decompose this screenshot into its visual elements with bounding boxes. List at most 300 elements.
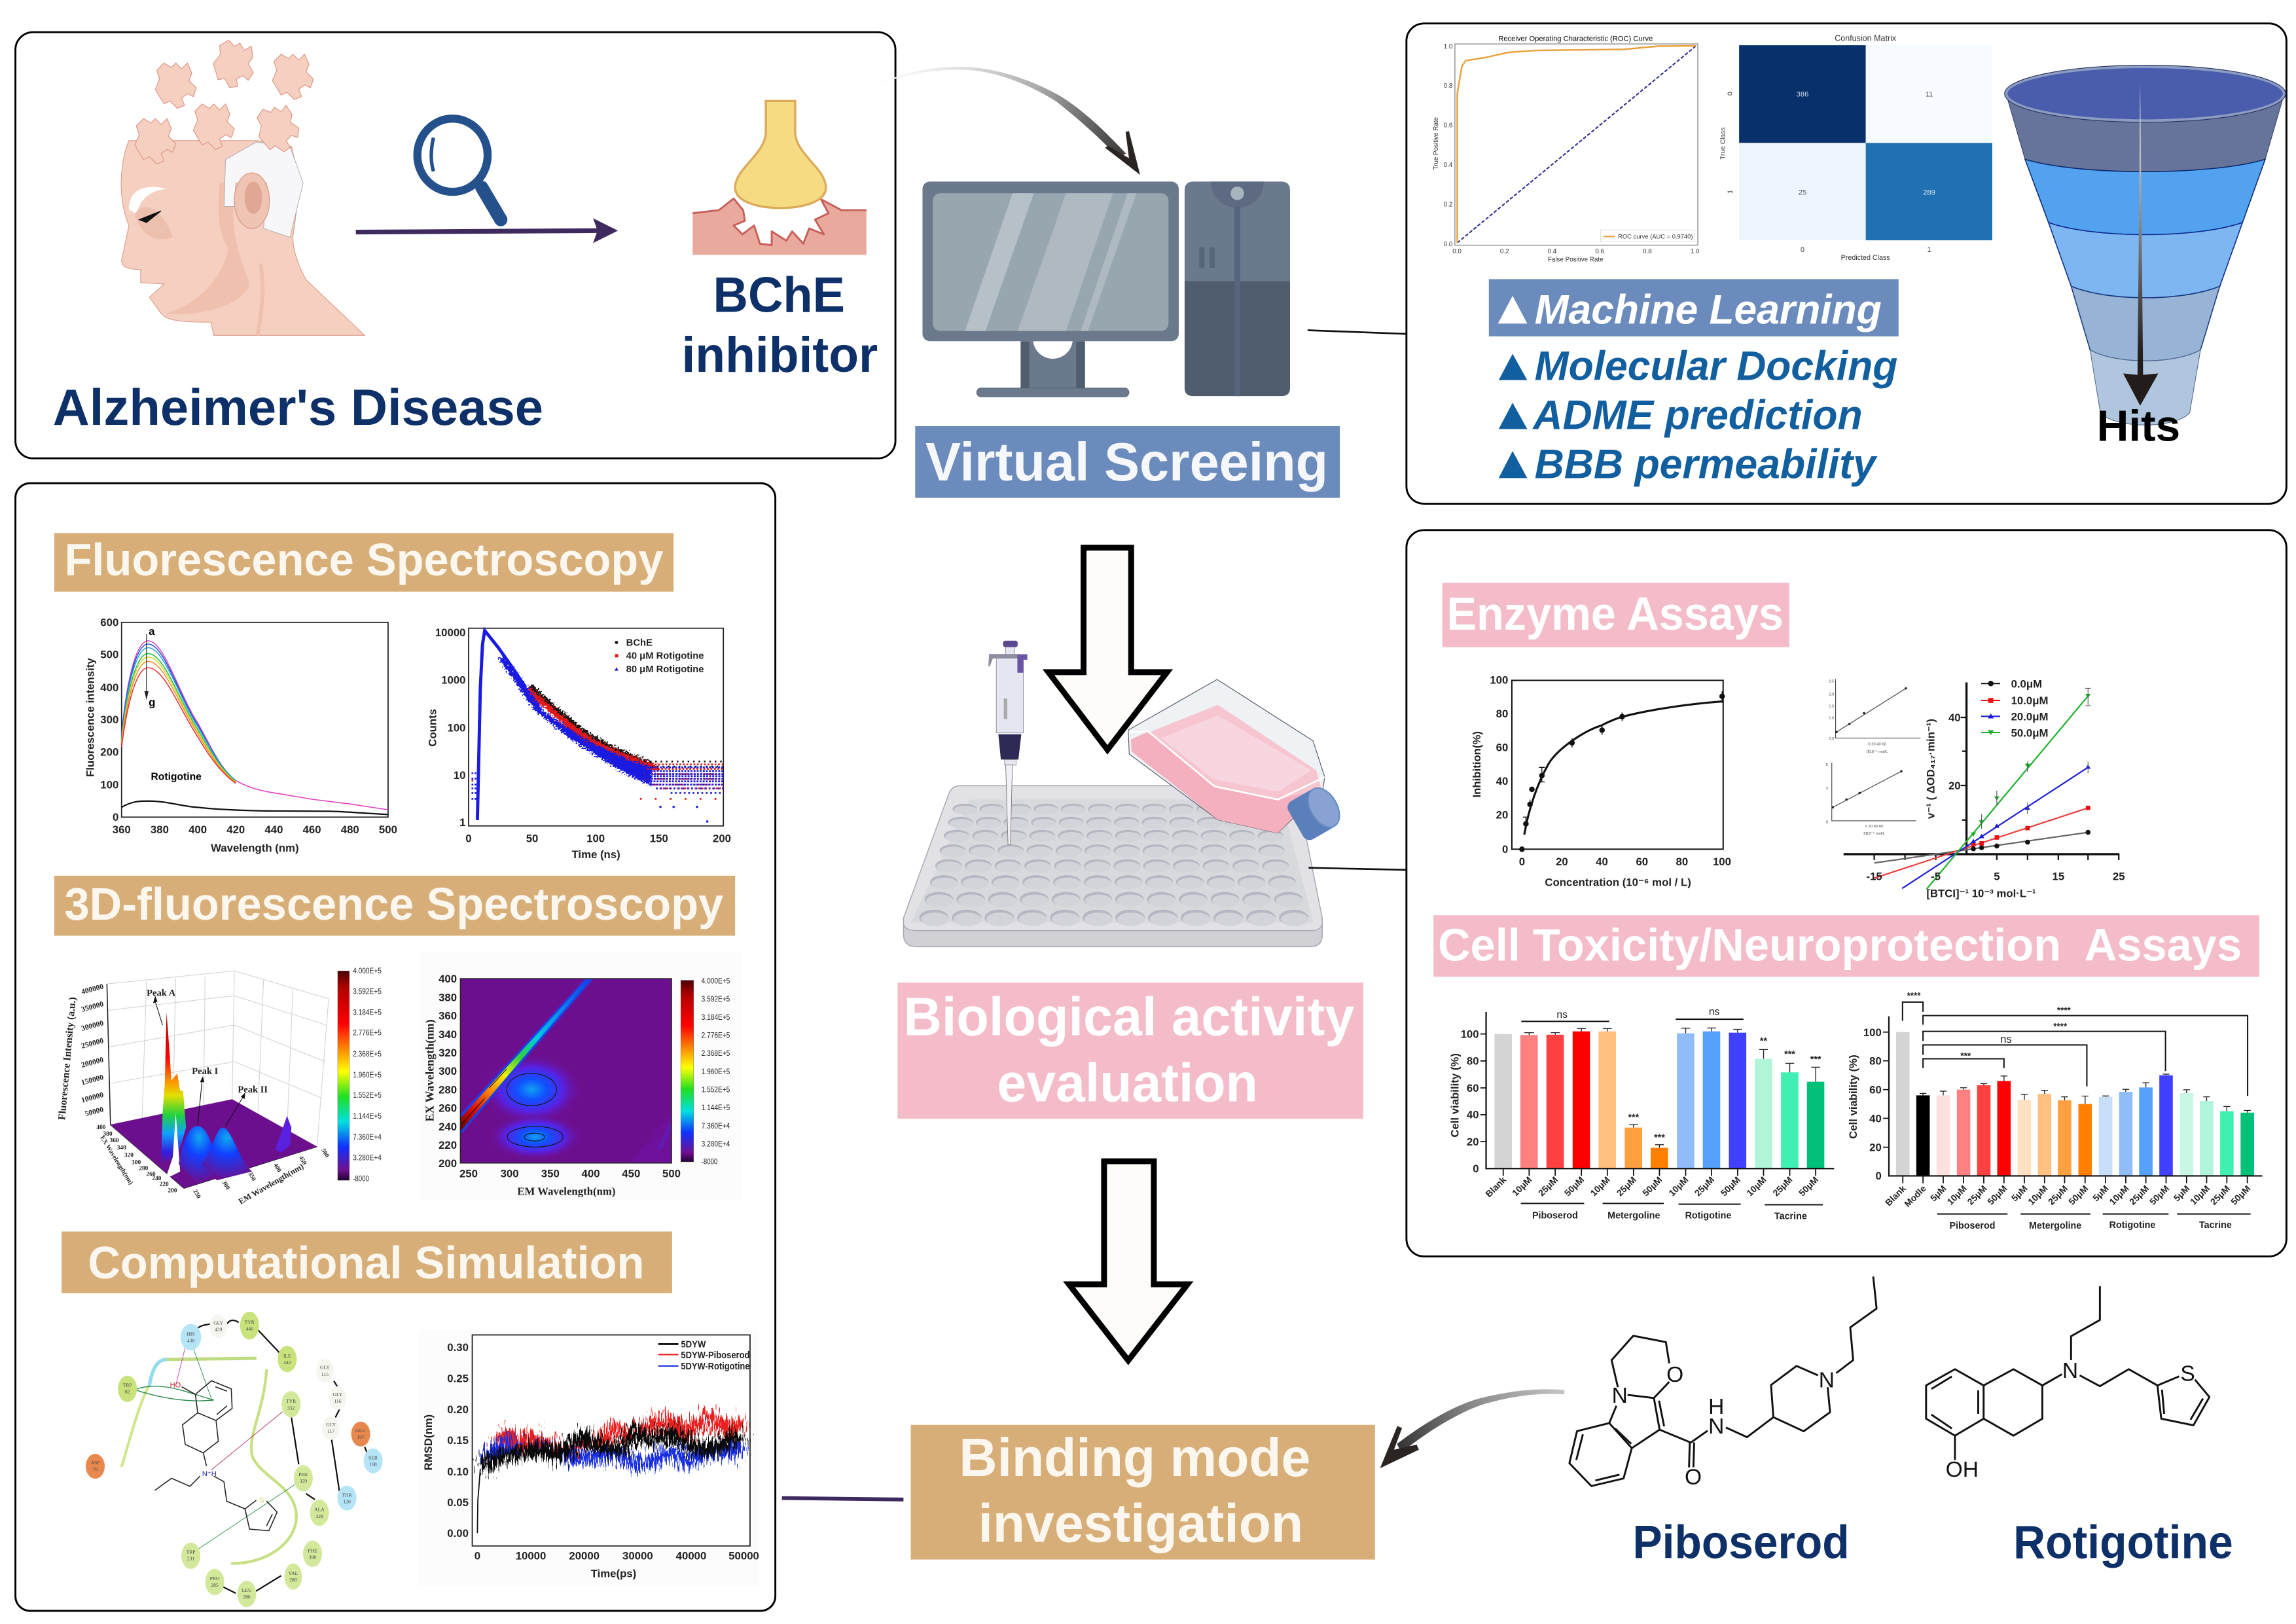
chart: cell viability toxicity bars: Rotigotine (1685, 1210, 1731, 1221)
label: Machine Learning (1489, 279, 1899, 336)
chart: cell viability toxicity bars: 25μM (1770, 1174, 1795, 1198)
diagram: ligand interaction map: PHE (298, 1471, 308, 1477)
chart: fluorescence decay: 0 (465, 832, 472, 844)
chart: 3D surface plot: 1.960E+5 (353, 1070, 382, 1079)
label: Binding mode investigation: investigation (978, 1493, 1303, 1554)
diagram: ligand interaction map (86, 1312, 383, 1607)
chart: fluorescence emission spectra: 600 (100, 616, 118, 628)
chart: neuroprotection bars: 50μM (2066, 1183, 2090, 1207)
label: Biological activity evaluation: Biological activity (903, 986, 1354, 1047)
chart: confusion matrix: True Class (1719, 128, 1727, 160)
diagram: ligand interaction map: 439 (215, 1327, 223, 1333)
chart: Lineweaver-Burk plot: 40 (1948, 712, 1961, 724)
chart: neuroprotection bars: 60 (1869, 1083, 1882, 1096)
chart: Lineweaver-Burk plot: 10.0μM (2011, 695, 2048, 707)
chart: inhibition curve: 0 (1519, 856, 1525, 868)
chart: 2D contour plot: 1.552E+5 (702, 1085, 730, 1094)
chart: 2D contour plot: 240 (439, 1121, 457, 1133)
connector: plate to assays panel (1308, 868, 1406, 870)
chart: cell viability toxicity bars: ** (1760, 1036, 1767, 1047)
chart: cell viability toxicity bars: *** (1654, 1133, 1665, 1144)
chart: 2D contour plot: 300 (439, 1065, 457, 1077)
chart: neuroprotection bars: 25μM (1965, 1183, 1989, 1207)
chart: neuroprotection bars: Modle (1902, 1183, 1928, 1209)
diagram: ligand interaction map: GLY (326, 1422, 336, 1428)
diagram: ligand interaction map: LEU (242, 1587, 252, 1593)
diagram: ligand interaction map: TYR (245, 1319, 255, 1325)
chart: Lineweaver-Burk plot: 5 (1826, 763, 1828, 767)
chart: cell viability toxicity bars: 0 (1473, 1163, 1479, 1175)
chart: RMSD time series (419, 1329, 759, 1586)
structure: Piboserod molecule (1570, 1276, 1876, 1489)
chart: RMSD time series: 20000 (569, 1550, 600, 1562)
chart: inhibition curve: 60 (1636, 856, 1648, 868)
heading: Alzheimer's Disease: Alzheimer's Disease (53, 378, 543, 436)
label: Binding mode investigation: Binding mode (959, 1427, 1310, 1488)
chart: neuroprotection bars: **** (1907, 991, 1921, 1001)
chart: 3D surface plot: 350 (247, 1171, 257, 1183)
structure: Rotigotine molecule: N (2062, 1359, 2078, 1383)
chart: Lineweaver-Burk plot (1826, 677, 2125, 899)
chart: confusion matrix: 1 (1928, 246, 1931, 254)
chart: Lineweaver-Burk plot: [I]10⁻⁶ mol/L (1867, 749, 1888, 754)
arrow: downward to biological evaluation (1049, 548, 1167, 749)
chart: cell viability toxicity bars: 10μM (1666, 1174, 1691, 1198)
chart: 3D surface plot: 150000 (81, 1073, 105, 1087)
chart: fluorescence decay: Time (ns) (571, 848, 620, 861)
chart: neuroprotection bars: 5μM (2009, 1183, 2030, 1203)
chart: fluorescence emission spectra: 400 (100, 681, 118, 694)
chart: ROC curve: 1.0 (1691, 248, 1700, 255)
chart: RMSD time series: 0.15 (447, 1434, 469, 1447)
chart: fluorescence decay: 200 (713, 832, 731, 844)
arrow: downward to binding mode (1069, 1161, 1187, 1360)
chart: ROC curve: 0.4 (1548, 248, 1557, 255)
chart: inhibition curve: 40 (1596, 856, 1608, 868)
chart: confusion matrix: 0 (1727, 92, 1734, 96)
chart: Lineweaver-Burk plot: 1.0 (1829, 716, 1834, 720)
chart: 2D contour plot: 4.000E+5 (702, 977, 730, 986)
chart: neuroprotection bars: 25μM (2046, 1183, 2070, 1207)
chart: Lineweaver-Burk plot: 0 20 40 60 (1865, 825, 1883, 829)
chart: cell viability toxicity bars: 50μM (1562, 1174, 1586, 1198)
chart: fluorescence emission spectra: 440 (264, 823, 283, 836)
chart: neuroprotection bars: Tacrine (2199, 1220, 2232, 1231)
chart: cell viability toxicity bars: 100 (1461, 1028, 1479, 1040)
chart: 2D contour plot: 280 (439, 1083, 457, 1096)
chart: 3D surface plot: 350000 (81, 1000, 105, 1014)
chart: neuroprotection bars: Blank (1883, 1183, 1908, 1208)
chart: 3D surface plot: 1.552E+5 (353, 1091, 382, 1100)
text: BChE inhibitor (681, 268, 878, 383)
chart: 2D contour plot: 350 (541, 1168, 560, 1180)
structure: Piboserod molecule: N (1819, 1369, 1835, 1393)
chart: ROC curve: False Positive Rate (1548, 256, 1604, 263)
structure: Rotigotine molecule: OH (1946, 1458, 1979, 1482)
label: Enzyme Assays: Enzyme Assays (1446, 588, 1784, 640)
connector: simulation panel to binding mode (782, 1498, 903, 1500)
chart: neuroprotection bars: 5μM (2090, 1183, 2111, 1203)
chart: fluorescence decay: 1 (459, 816, 465, 829)
chart: cell viability toxicity bars: Metergoline (1607, 1210, 1660, 1221)
structure: Piboserod molecule: H (1708, 1395, 1724, 1419)
chart: 3D surface plot: 100000 (81, 1091, 105, 1105)
chart: 3D surface plot: 300 (221, 1180, 231, 1191)
chart: Lineweaver-Burk plot: 0 20 40 60 (1868, 743, 1886, 747)
chart: neuroprotection bars: 50μM (2229, 1183, 2252, 1207)
chart: 2D contour plot: 2.776E+5 (702, 1031, 730, 1040)
chart: fluorescence emission spectra: 100 (100, 779, 118, 791)
chart: 3D surface plot: 400 (272, 1163, 282, 1174)
chart: inhibition curve: Concentration (10⁻⁶ mol / L) (1545, 876, 1691, 888)
chart: cell viability toxicity bars: 50μM (1640, 1174, 1664, 1198)
chart: RMSD time series: 0.10 (447, 1466, 469, 1478)
structure: Rotigotine molecule: S (2180, 1362, 2195, 1386)
chart: 2D contour plot: EX Wavelength(nm) (423, 1019, 437, 1121)
icon: 96-well plate (903, 785, 1322, 947)
chart: 3D surface plot: Peak II (238, 1085, 268, 1095)
chart: fluorescence decay: 40 μM Rotigotine (626, 651, 704, 662)
chart: 2D contour plot: 3.280E+4 (702, 1140, 730, 1149)
diagram: ligand interaction map: 115 (321, 1371, 329, 1377)
chart: fluorescence decay: 10 (454, 769, 465, 782)
chart: Lineweaver-Burk plot: -5 (1931, 871, 1941, 883)
chart: 2D contour plot: 450 (622, 1168, 640, 1180)
chart: neuroprotection bars: 20 (1869, 1141, 1882, 1153)
chart: 3D surface plot: 3.592E+5 (353, 987, 382, 996)
chart: 2D contour plot: 2.368E+5 (702, 1049, 730, 1058)
text: ADME prediction: ADME prediction (1532, 392, 1863, 438)
chart: 3D surface plot: 380 (103, 1131, 113, 1138)
chart: Lineweaver-Burk plot: 5 (1994, 871, 2000, 883)
chart: 2D contour plot (420, 952, 741, 1200)
diagram: ligand interaction map: 438 (187, 1337, 194, 1343)
chart: inhibition curve: 0 (1502, 843, 1508, 856)
chart: 3D surface plot: 50000 (84, 1105, 105, 1118)
label: Binding mode investigation (911, 1425, 1375, 1560)
icon: desktop computer (922, 181, 1290, 397)
chart: confusion matrix: 289 (1923, 189, 1935, 197)
chart: RMSD time series: 30000 (622, 1550, 653, 1562)
chart: neuroprotection bars: Metergoline (2029, 1221, 2081, 1231)
chart: 2D contour plot: 250 (459, 1168, 478, 1180)
chart: RMSD time series: 5DYW-Rotigotine (681, 1362, 750, 1372)
chart: neuroprotection bars: 10μM (2026, 1183, 2050, 1207)
chart: 2D contour plot: 320 (439, 1047, 457, 1059)
chart: ROC curve (1433, 35, 1700, 263)
chart: 2D contour plot: 360 (439, 1010, 457, 1022)
structure: Piboserod molecule: O (1685, 1465, 1702, 1489)
chart: neuroprotection bars: ns (2000, 1033, 2012, 1045)
chart: cell viability toxicity bars (1448, 1006, 1834, 1221)
chart: 3D surface plot: 340 (117, 1145, 126, 1151)
chart: 2D contour plot: 1.960E+5 (702, 1067, 730, 1076)
chart: cell viability toxicity bars: 25μM (1693, 1174, 1716, 1198)
chart: fluorescence decay: 1000 (441, 674, 465, 687)
diagram: ligand interaction map: 120 (343, 1498, 351, 1504)
chart: 3D surface plot: 200 (168, 1188, 177, 1195)
chart: fluorescence decay: BChE (626, 638, 653, 649)
chart: 2D contour plot: 380 (439, 992, 457, 1004)
diagram: ligand interaction map: 329 (300, 1478, 307, 1484)
chart: fluorescence decay: 150 (650, 832, 668, 844)
chart: Lineweaver-Burk plot: 25 (2113, 871, 2125, 883)
chart: 2D contour plot: 300 (501, 1168, 519, 1180)
diagram: ligand interaction map: THR (342, 1492, 353, 1498)
chart: 3D surface plot: Fluorescence Intensity (a.u.) (56, 996, 79, 1121)
chart: inhibition curve: 80 (1676, 856, 1688, 868)
diagram: ligand interaction map: 328 (315, 1513, 323, 1519)
chart: Lineweaver-Burk plot: v⁻¹ ( ΔOD₄₁₇·min⁻¹) (1924, 719, 1937, 819)
text: BChE inhibitor: inhibitor (681, 327, 878, 383)
chart: Lineweaver-Burk plot: 2.0 (1829, 693, 1834, 697)
chart: RMSD time series: 0.20 (447, 1403, 469, 1416)
chart: neuroprotection bars: **** (2057, 1005, 2072, 1015)
chart: cell viability toxicity bars: 20 (1467, 1136, 1479, 1148)
chart: Lineweaver-Burk plot: 20.0μM (2011, 711, 2048, 723)
chart: 3D surface plot: 300000 (81, 1019, 105, 1033)
chart: 3D surface plot: 400 (96, 1125, 106, 1131)
chart: ROC curve: 0.0 (1452, 248, 1462, 255)
chart: 3D surface plot: 2.776E+5 (353, 1028, 382, 1038)
chart: Lineweaver-Burk plot: 0.0 (1829, 737, 1834, 741)
chart: RMSD time series: 10000 (516, 1550, 546, 1562)
chart: confusion matrix: 11 (1926, 91, 1933, 99)
label: Rotigotine: Rotigotine (2013, 1516, 2233, 1568)
chart: fluorescence emission spectra: 420 (226, 823, 245, 836)
chart: cell viability toxicity bars: Cell viability (%) (1448, 1053, 1461, 1138)
chart: inhibition curve: 100 (1490, 674, 1508, 687)
chart: 3D surface plot: 280 (139, 1165, 149, 1172)
chart: RMSD time series: 0.00 (447, 1527, 469, 1540)
diagram: ligand interaction map: 442 (283, 1360, 291, 1365)
chart: 3D surface plot: EX Wavelength(nm) (98, 1134, 134, 1186)
chart: confusion matrix: 25 (1799, 189, 1806, 197)
chart: cell viability toxicity bars: *** (1628, 1112, 1640, 1123)
chart: neuroprotection bars: 50μM (1985, 1183, 2009, 1207)
chart: 2D contour plot: 1.144E+5 (702, 1103, 730, 1112)
chart: 3D surface plot: 7.360E+4 (353, 1132, 382, 1142)
chart: confusion matrix: Predicted Class (1841, 254, 1890, 262)
structure: Rotigotine molecule (1926, 1286, 2210, 1482)
diagram: ligand interaction map: ALA (314, 1507, 325, 1513)
chart: cell viability toxicity bars: 80 (1467, 1055, 1479, 1067)
diagram: ligand interaction map: 398 (309, 1554, 316, 1560)
chart: 3D surface plot: 4.000E+5 (353, 966, 382, 975)
diagram: ligand interaction map: 70 (93, 1466, 98, 1472)
chart: ROC curve: 1.0 (1444, 43, 1453, 50)
chart: 3D surface plot: 240 (152, 1176, 162, 1182)
structure: Piboserod molecule: N (1708, 1415, 1724, 1439)
chart: 3D surface plot: EM Wavelength(nm) (237, 1162, 305, 1206)
chart: Lineweaver-Burk plot: 1.5 (1829, 705, 1834, 709)
diagram: ligand interaction map: TYR (286, 1398, 296, 1404)
diagram: ligand interaction map: 116 (334, 1398, 342, 1404)
chart: inhibition curve: 100 (1713, 856, 1731, 868)
diagram: ligand interaction map: GLY (333, 1392, 343, 1398)
diagram: ligand interaction map: 82 (125, 1389, 130, 1395)
label: Biological activity evaluation: evaluation (997, 1052, 1258, 1113)
chart: fluorescence emission spectra: g (149, 696, 155, 708)
chart: RMSD time series: 50000 (728, 1550, 759, 1562)
label: Piboserod: Piboserod (1632, 1516, 1850, 1568)
chart: ROC curve: 0.6 (1595, 248, 1605, 255)
chart: ROC curve: ROC curve (AUC = 0.9740) (1618, 233, 1693, 240)
chart: fluorescence emission spectra: 400 (188, 823, 207, 836)
chart: 2D contour plot: EM Wavelength(nm) (517, 1185, 615, 1198)
chart: fluorescence emission spectra: 500 (100, 649, 118, 661)
icon: elderly head with puzzle pieces (121, 38, 365, 335)
chart: 3D surface plot: 450 (297, 1155, 308, 1166)
chart: inhibition curve: 60 (1496, 742, 1508, 754)
chart: neuroprotection bars (1847, 991, 2262, 1231)
chart: fluorescence emission spectra: 300 (100, 713, 118, 726)
chart: 3D surface plot: 200000 (81, 1055, 105, 1070)
chart: inhibition curve (1471, 674, 1731, 888)
text: BChE inhibitor: BChE (713, 268, 845, 323)
chart: ROC curve: 0.0 (1444, 241, 1453, 248)
chart: cell viability toxicity bars: 50μM (1719, 1174, 1742, 1198)
label: Virtual Screeing: Virtual Screeing (925, 431, 1328, 492)
chart: cell viability toxicity bars: 10μM (1510, 1174, 1534, 1198)
diagram: ligand interaction map: N⁺H (202, 1470, 217, 1478)
chart: neuroprotection bars: 80 (1869, 1055, 1882, 1067)
chart: RMSD time series: 0.30 (447, 1341, 469, 1354)
chart: confusion matrix: 1 (1727, 190, 1734, 194)
chart: ROC curve: 0.8 (1444, 82, 1453, 90)
diagram: ligand interaction map: 285 (211, 1582, 219, 1588)
chart: 3D surface plot: 250 (191, 1189, 202, 1200)
chart: cell viability toxicity bars: 25μM (1536, 1174, 1560, 1198)
chart: 3D surface plot: 500 (319, 1147, 330, 1159)
icon: pipette (988, 641, 1028, 845)
chart: Lineweaver-Burk plot: 50.0μM (2011, 727, 2048, 739)
diagram: ligand interaction map: 440 (246, 1326, 253, 1331)
diagram: ligand interaction map: S (259, 1496, 264, 1504)
arrow: disease to target (356, 218, 618, 243)
diagram: ligand interaction map: GLU (355, 1428, 366, 1434)
chart: 3D surface plot: 360 (110, 1138, 119, 1144)
chart: cell viability toxicity bars: Blank (1483, 1174, 1508, 1199)
diagram: ligand interaction map: PRO (210, 1576, 220, 1581)
label: Machine Learning: Machine Learning (1535, 287, 1882, 333)
chart: ROC curve: Receiver Operating Characteristic (ROC) Curve (1498, 35, 1653, 43)
chart: fluorescence decay: 100 (448, 721, 465, 734)
chart: ROC curve: True Positive Rate (1433, 117, 1440, 170)
structure: Piboserod molecule: N (1612, 1384, 1628, 1408)
diagram: ligand interaction map: ILE (283, 1353, 291, 1359)
diagram: ligand interaction map: ASP (91, 1460, 99, 1466)
chart: 2D contour plot: 400 (439, 973, 457, 985)
chart: 3D surface plot: 1.144E+5 (353, 1111, 382, 1121)
chart: Lineweaver-Burk plot: [I]10⁻⁶ mol/L (1863, 831, 1886, 836)
chart: 2D contour plot: 3.592E+5 (702, 994, 730, 1003)
diagram: ligand interaction map: 288 (289, 1577, 297, 1583)
diagram: ligand interaction map: HO (170, 1382, 181, 1390)
chart: RMSD time series: 5DYW (681, 1340, 706, 1350)
chart: cell viability toxicity bars: 10μM (1588, 1174, 1612, 1198)
chart: fluorescence emission spectra: 0 (113, 811, 118, 823)
chart: 2D contour plot: 3.184E+5 (702, 1013, 730, 1022)
chart: fluorescence emission spectra: 500 (379, 823, 397, 836)
panel: enzyme and cell assays (1407, 530, 2286, 1256)
chart: Lineweaver-Burk plot: 0.0μM (2011, 677, 2042, 690)
chart: neuroprotection bars: **** (2053, 1022, 2068, 1032)
chart: neuroprotection bars: 100 (1863, 1026, 1882, 1039)
chart: inhibition curve: 20 (1496, 809, 1508, 821)
chart: neuroprotection bars: 10μM (2107, 1183, 2131, 1207)
chart: neuroprotection bars: 40 (1869, 1112, 1882, 1125)
label: Cell Toxicity/Neuroprotection Assays: Cell Toxicity/Neuroprotection Assays (1438, 920, 2242, 971)
chart: 3D surface plot: Peak A (147, 988, 176, 998)
chart: ROC curve: 0.2 (1500, 248, 1509, 255)
chart: 3D surface plot: 400000 (81, 982, 105, 996)
chart: fluorescence emission spectra: 360 (113, 823, 131, 836)
chart: 3D surface plot: 3.280E+4 (353, 1153, 382, 1163)
chart: RMSD time series: 5DYW-Piboserod (681, 1350, 749, 1361)
label: Fluorescence Spectroscopy: Fluorescence Spectroscopy (65, 534, 664, 585)
chart: 2D contour plot: 7.360E+4 (702, 1121, 730, 1130)
chart: Lineweaver-Burk plot: 0 (1826, 820, 1828, 824)
chart: fluorescence emission spectra: a (149, 625, 155, 638)
chart: fluorescence emission spectra: 480 (341, 823, 359, 836)
diagram: ligand interaction map: 286 (243, 1594, 251, 1600)
label: 3D-fluorescence Spectroscopy: 3D-fluorescence Spectroscopy (65, 878, 724, 929)
chart: neuroprotection bars: 10μM (2188, 1183, 2212, 1207)
chart: 3D surface plot (56, 966, 382, 1206)
chart: fluorescence decay: 80 μM Rotigotine (626, 664, 704, 675)
chart: ROC curve: 0.4 (1444, 162, 1453, 169)
chart: 2D contour plot: 400 (582, 1168, 600, 1180)
chart: cell viability toxicity bars: 40 (1467, 1109, 1479, 1121)
diagram: ligand interaction map: 197 (357, 1434, 365, 1440)
chart: cell viability toxicity bars: ns (1556, 1009, 1568, 1020)
chart: ROC curve: 0.8 (1643, 248, 1652, 255)
chart: 2D contour plot: -8000 (702, 1157, 717, 1166)
label: Biological activity evaluation (897, 983, 1363, 1119)
chart: Lineweaver-Burk plot: -15 (1867, 871, 1882, 883)
chart: 3D surface plot: 320 (124, 1152, 134, 1159)
diagram: ligand interaction map: 332 (287, 1405, 295, 1411)
chart: inhibition curve: Inhibition(%) (1471, 731, 1483, 798)
chart: Lineweaver-Burk plot: 20 (1948, 780, 1961, 792)
chart: neuroprotection bars: 25μM (2127, 1183, 2151, 1207)
chart: cell viability toxicity bars: Piboserod (1532, 1210, 1578, 1221)
chart: ROC curve: 0.6 (1444, 122, 1453, 130)
diagram: ligand interaction map: GLY (213, 1320, 224, 1326)
text: Molecular Docking: Molecular Docking (1535, 344, 1897, 389)
chart: 2D contour plot: 340 (439, 1028, 457, 1041)
chart: neuroprotection bars: 25μM (2208, 1183, 2232, 1207)
diagram: ligand interaction map: 117 (327, 1428, 334, 1434)
chart: 3D surface plot: -8000 (353, 1174, 369, 1183)
icon: synapse (692, 101, 867, 255)
text: Hits: Hits (2097, 401, 2180, 450)
chart: 2D contour plot: 500 (662, 1168, 681, 1180)
chart: confusion matrix: 0 (1801, 246, 1804, 254)
chart: 2D contour plot: 220 (439, 1139, 457, 1151)
chart: fluorescence decay: 10000 (435, 626, 465, 639)
chart: inhibition curve: 20 (1556, 856, 1568, 868)
chart: inhibition curve: 40 (1496, 775, 1508, 787)
chart: cell viability toxicity bars: 25μM (1614, 1174, 1638, 1198)
chart: neuroprotection bars: 50μM (2147, 1183, 2171, 1207)
diagram: ligand interaction map: VAL (289, 1570, 298, 1576)
structure: Piboserod molecule: O (1666, 1363, 1683, 1387)
connector: computer to panel (1308, 330, 1406, 334)
icon: magnifying glass (418, 118, 501, 220)
chart: cell viability toxicity bars: 60 (1467, 1082, 1479, 1094)
